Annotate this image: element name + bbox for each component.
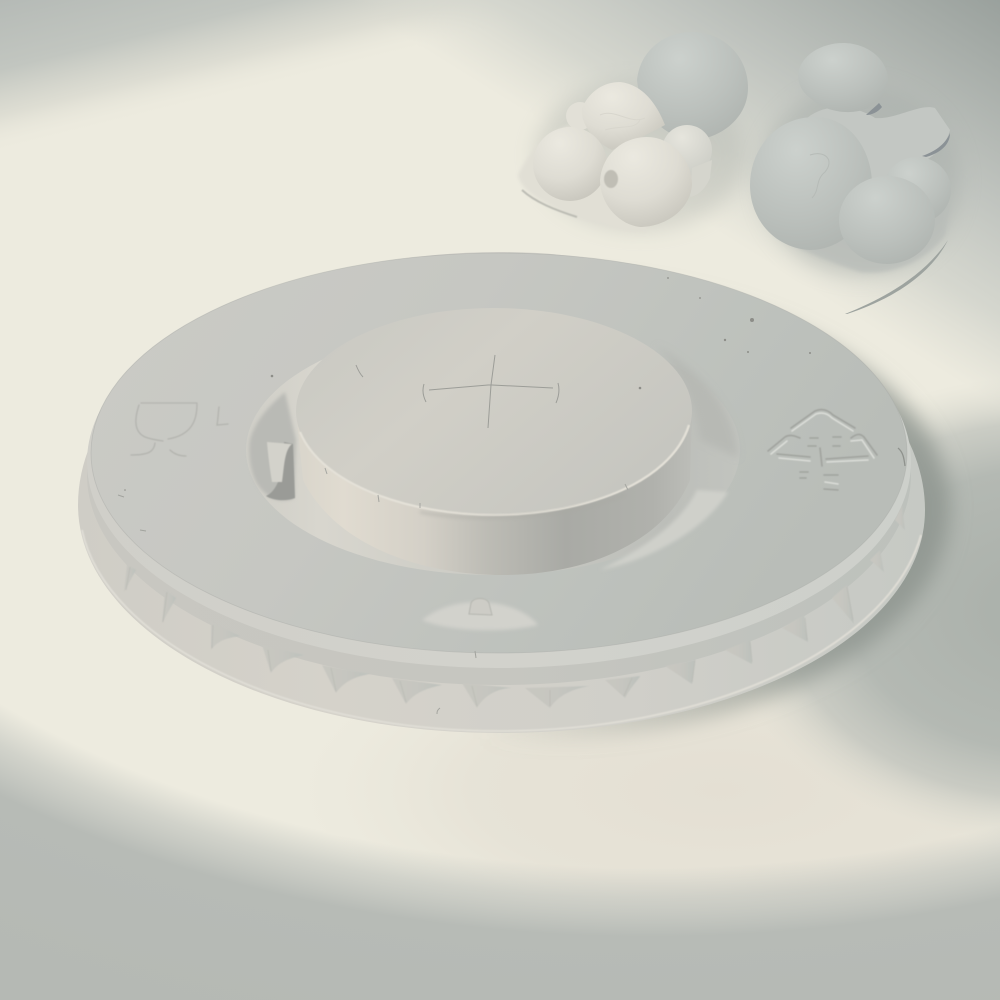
notch dark stripe (266, 442, 295, 500)
cup strokes (131, 403, 228, 456)
notch dark recess (249, 392, 296, 500)
flat top edge line (91, 253, 907, 653)
lid raised lip (87, 256, 911, 668)
well lower right highlight (600, 490, 728, 570)
big grey sphere (750, 117, 872, 250)
surface nicks (118, 495, 476, 714)
side mark (898, 448, 905, 466)
pale sphere lower lobe (690, 160, 712, 197)
cream left sphere (533, 127, 607, 201)
embossed cup mark (131, 403, 228, 456)
right cluster soft shadow (760, 85, 960, 275)
cluster base film (775, 170, 950, 273)
small back sphere (566, 102, 594, 130)
bottom tab (422, 598, 538, 630)
rim notches (124, 505, 905, 708)
front sphere dimple (604, 170, 618, 188)
big sphere texture (810, 154, 829, 198)
emboss light strokes (771, 413, 874, 484)
spheres: right cluster (750, 43, 960, 314)
cross strokes (356, 355, 559, 428)
dome rim highlight (300, 425, 689, 515)
lid cast shadow (100, 276, 950, 740)
back blob (807, 107, 950, 200)
notch crease lines (126, 567, 853, 706)
recessed well (246, 325, 740, 575)
texture lines (600, 113, 645, 130)
tray shadow crease (522, 190, 577, 217)
emboss dark strokes (768, 410, 877, 490)
textured middle sphere (582, 82, 665, 150)
well upper right shadow (655, 345, 738, 458)
rim ticks (325, 468, 628, 508)
small pale sphere (662, 125, 712, 175)
tab bump (469, 598, 492, 615)
lid flat top (91, 253, 907, 653)
sip notch (249, 392, 296, 500)
lid outer body (78, 252, 925, 733)
left cluster soft shadow (535, 80, 745, 230)
lid bottom edge highlight (82, 530, 921, 731)
tray base (518, 125, 648, 232)
plastic specks (124, 277, 811, 491)
plastic lid (78, 252, 925, 733)
dome wall (296, 411, 692, 575)
spheres: left cluster (518, 32, 748, 232)
dome rim shade (420, 495, 625, 518)
large grey sphere (637, 32, 748, 140)
back right sphere (883, 157, 951, 223)
tab highlight (422, 602, 538, 630)
embossed recycling triangle (768, 410, 877, 490)
curved strand (845, 240, 948, 314)
notch light face (267, 442, 292, 482)
lid groove band (87, 265, 911, 685)
front grey sphere (839, 176, 935, 264)
dark slivers (866, 103, 950, 157)
top sphere (798, 43, 888, 112)
dome top (296, 308, 692, 514)
straw slot cross (356, 355, 559, 428)
cream front sphere (600, 137, 692, 227)
